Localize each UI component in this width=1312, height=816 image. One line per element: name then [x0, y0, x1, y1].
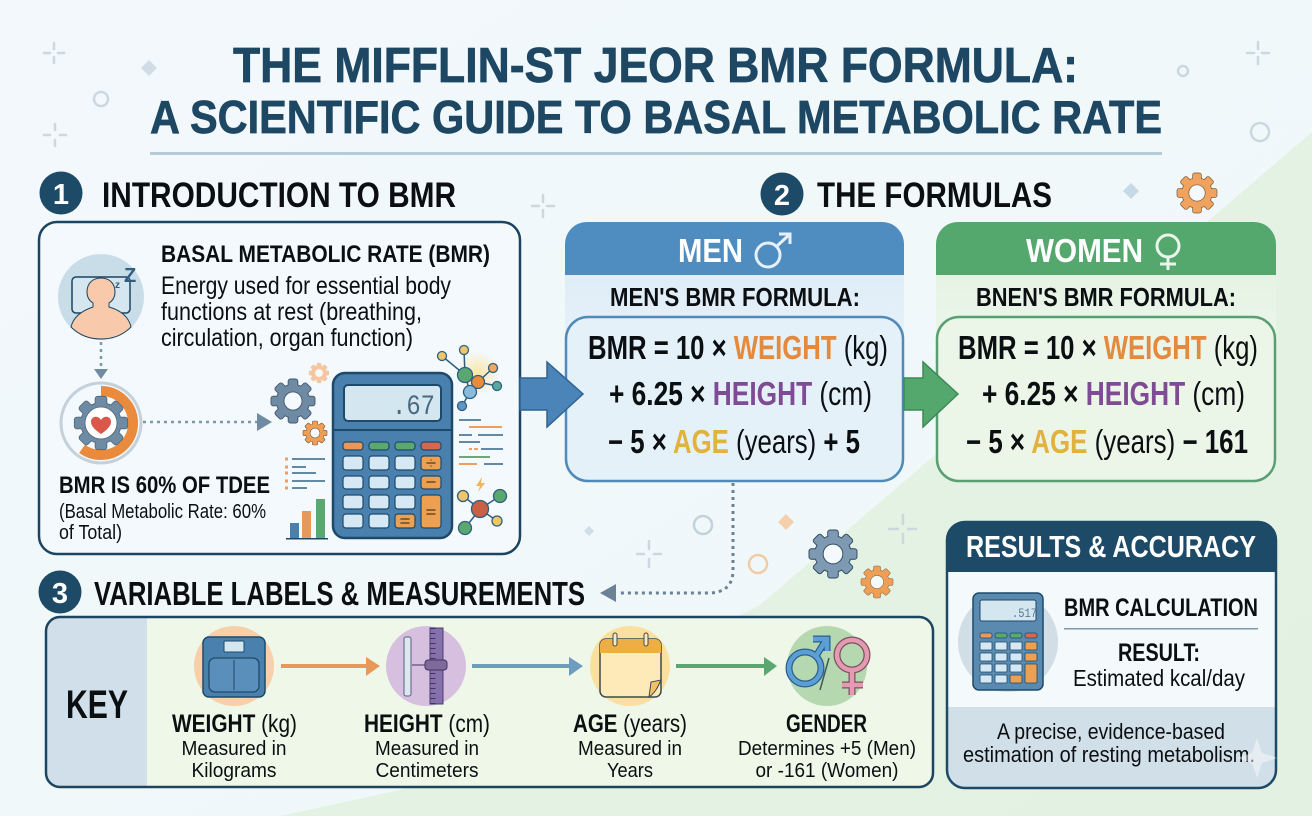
heading: section 1: INTRODUCTION TO BMR — [102, 176, 456, 215]
text: BMR calculation result: Estimated kcal/day — [1073, 665, 1245, 691]
panel: results and accuracy — [947, 522, 1277, 788]
icon: female symbol — [1157, 235, 1179, 270]
panel: men formula: MEN — [678, 232, 743, 269]
icon: data lines right — [459, 420, 503, 464]
title: A SCIENTIFIC GUIDE TO BASAL METABOLIC RATE — [150, 91, 1162, 143]
text: BMR share of TDEE: (Basal Metabolic Rate: 60% — [59, 501, 266, 523]
text: age label: Measured in — [578, 738, 682, 760]
icon: calculator: .67 — [392, 392, 435, 423]
icon: weight scale — [194, 626, 274, 706]
arrow: percentage to calculator — [143, 413, 272, 431]
icon: list lines left — [285, 459, 325, 488]
heading: section 2: THE FORMULAS — [817, 176, 1052, 215]
text: BMR calculation result: BMR CALCULATION — [1064, 594, 1258, 622]
text: height label: Measured in — [375, 738, 479, 760]
icon: small calculator: .517 — [1012, 606, 1037, 621]
text: BMR definition — [161, 241, 490, 352]
title — [150, 39, 1162, 143]
heading: section 3: 3 — [52, 578, 68, 610]
panel: men formula: MEN'S BMR FORMULA: — [610, 282, 860, 312]
heading: section 1: 1 — [53, 179, 69, 211]
text: accuracy statement: estimation of resting metabolism. — [963, 742, 1255, 767]
text: gender label: GENDER — [786, 710, 867, 738]
arrow: weight to height — [281, 657, 380, 676]
icon: 60 percent donut with heart gear — [61, 383, 141, 463]
panel: key — [46, 617, 933, 787]
text: gender label: Determines +5 (Men) — [738, 738, 916, 760]
text: BMR share of TDEE: BMR IS 60% OF TDEE — [59, 472, 270, 499]
arrow: sleep to percentage — [94, 342, 108, 379]
text: men formula: + 6.25 × HEIGHT (cm) — [609, 375, 872, 412]
icon: bar chart — [286, 499, 328, 540]
icon: sleeping person — [58, 254, 144, 340]
icon: molecule bottom — [458, 477, 506, 534]
text: women formula: + 6.25 × HEIGHT (cm) — [982, 375, 1245, 412]
text: age label: Years — [607, 760, 653, 782]
icon: gears — [271, 363, 329, 445]
text: BMR definition: BASAL METABOLIC RATE (BMR) — [161, 241, 490, 268]
icon: gender symbols — [787, 626, 867, 706]
text: key label: KEY — [66, 683, 128, 727]
text: women formula — [958, 329, 1258, 460]
heading: section 3 — [38, 570, 585, 614]
heading: section 1 — [40, 172, 456, 215]
icon: height ruler — [386, 626, 466, 706]
arrow: age to gender — [676, 657, 777, 676]
icon: calculator — [333, 373, 452, 538]
text: BMR definition: functions at rest (breathing, — [161, 298, 422, 326]
text: gender label — [738, 710, 916, 782]
title: THE MIFFLIN-ST JEOR BMR FORMULA: — [233, 39, 1078, 93]
text: men formula: − 5 × AGE (years) + 5 — [608, 423, 860, 460]
text: weight label — [172, 710, 297, 782]
panel: men formula — [565, 222, 904, 481]
text: men formula — [588, 329, 888, 460]
icon: sleeping person: Z — [124, 265, 136, 287]
text: height label: HEIGHT (cm) — [364, 710, 490, 738]
arrow: formulas to variables — [600, 483, 733, 602]
text: BMR definition: Energy used for essential body — [161, 272, 451, 300]
text: BMR definition: circulation, organ function) — [161, 324, 413, 352]
text: men formula: BMR = 10 × WEIGHT (kg) — [588, 329, 888, 366]
arrow: men to women — [904, 362, 958, 427]
arrow: height to age — [472, 657, 583, 676]
icon: calendar — [590, 626, 670, 706]
icon: male symbol — [756, 234, 790, 267]
panel: women formula: BNEN'S BMR FORMULA: — [976, 282, 1236, 312]
text: BMR share of TDEE: of Total) — [59, 522, 122, 544]
heading: section 2: 2 — [774, 180, 790, 212]
arrow: intro to men — [520, 362, 583, 427]
icon: molecule top — [438, 346, 502, 410]
icon: decorative gears — [809, 530, 893, 598]
heading: section 2 — [760, 172, 1052, 216]
panel: introduction to BMR — [39, 222, 520, 554]
icon: sleeping person: z — [115, 280, 120, 291]
icon: small calculator — [958, 592, 1058, 692]
text: weight label: Kilograms — [192, 760, 276, 782]
text: BMR calculation result — [1064, 594, 1258, 691]
text: weight label: Measured in — [182, 738, 286, 760]
text: women formula: BMR = 10 × WEIGHT (kg) — [958, 329, 1258, 366]
text: age label — [573, 710, 687, 782]
heading: section 3: VARIABLE LABELS & MEASUREMENTS — [94, 575, 585, 612]
text: age label: AGE (years) — [573, 710, 687, 738]
icon: orange gear — [1177, 173, 1217, 213]
text: BMR share of TDEE — [59, 472, 270, 544]
text: height label: Centimeters — [376, 760, 478, 782]
text: accuracy statement: A precise, evidence-based — [997, 719, 1225, 744]
text: height label — [364, 710, 490, 782]
text: BMR calculation result: RESULT: — [1118, 639, 1200, 667]
text: women formula: − 5 × AGE (years) − 161 — [966, 423, 1248, 460]
panel: women formula — [936, 222, 1276, 481]
text: weight label: WEIGHT (kg) — [172, 710, 297, 738]
text: accuracy statement — [963, 719, 1255, 767]
panel: women formula: WOMEN — [1026, 232, 1143, 269]
text: gender label: or -161 (Women) — [756, 760, 898, 782]
